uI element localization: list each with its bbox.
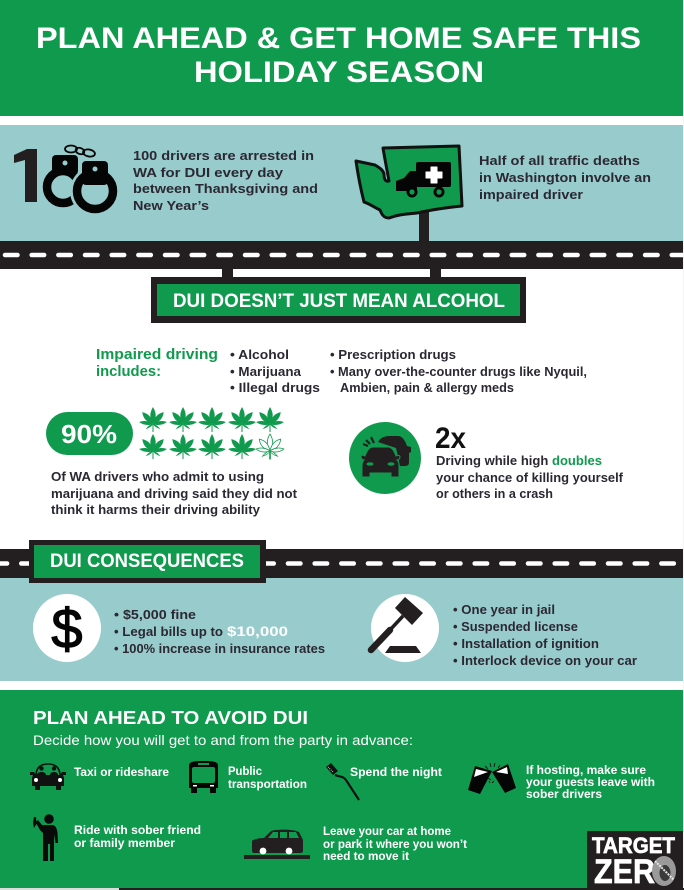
logo: Target Zero: TARGET	[592, 833, 676, 858]
text: financial consequences: $10,000	[227, 623, 288, 639]
text: legal consequences	[453, 602, 637, 668]
icon: dollar sign	[33, 594, 101, 662]
text: legal consequences: • One year in jail	[453, 602, 555, 617]
icon: gavel	[371, 594, 439, 662]
text: traffic deaths: impaired driver	[479, 187, 583, 202]
text: sober friend: Ride with sober friend	[74, 825, 201, 837]
text: marijuana statistic: think it harms their driving ability	[51, 502, 261, 517]
text: hosting: your guests leave with	[526, 777, 655, 789]
text: marijuana statistic: marijuana and driving said they did not	[51, 486, 298, 501]
text: hosting	[526, 765, 655, 801]
callout: 90 percent: 90%	[61, 419, 117, 449]
title: PLAN AHEAD & GET HOME SAFE THIS	[36, 22, 641, 55]
text: legal consequences: • Installation of ignition	[453, 636, 599, 651]
road: upper	[0, 241, 684, 269]
logo: Target Zero	[587, 831, 684, 890]
text: leave your car: Leave your car at home	[323, 826, 451, 838]
text: impaired driving includes: Impaired driving	[96, 347, 218, 363]
icon: person with keys	[33, 814, 58, 861]
text: sober friend	[74, 825, 201, 850]
text: arrests	[133, 148, 318, 213]
icon: taxi	[30, 764, 66, 790]
text: traffic deaths: Half of all traffic deaths	[479, 153, 640, 168]
icon: toothbrush	[326, 763, 359, 800]
text: spend the night: Spend the night	[350, 767, 442, 779]
icon: Washington sign with ambulance	[356, 146, 462, 242]
text: doubles statistic: your chance of killing yourself	[436, 470, 624, 485]
text: financial consequences: • 100% increase in insurance rates	[114, 641, 325, 656]
sign: DUI consequences	[29, 540, 266, 583]
text: impaired driving includes: • Many over-the-counter drugs like Nyquil,	[330, 364, 587, 379]
header banner	[0, 0, 684, 116]
text: impaired driving includes: • Alcohol	[230, 347, 289, 362]
text: subheading: Decide how you will get to and from the party in advance:	[33, 732, 413, 748]
text: marijuana statistic	[51, 469, 298, 517]
text: financial consequences: • Legal bills up to	[114, 624, 223, 639]
title	[36, 22, 641, 89]
text: doubles statistic: or others in a crash	[436, 486, 553, 501]
title: HOLIDAY SEASON	[194, 56, 484, 89]
icon: parked car	[244, 830, 310, 859]
text: financial consequences	[114, 607, 325, 656]
text: leave your car: need to move it	[323, 851, 409, 863]
text: public transportation	[228, 766, 307, 791]
panel: plan ahead	[0, 690, 684, 890]
sign: DUI consequences: DUI CONSEQUENCES	[50, 551, 244, 572]
text: arrests: New Year’s	[133, 198, 209, 213]
text: impaired driving includes: • Marijuana	[230, 364, 302, 379]
text: financial consequences: • $5,000 fine	[114, 607, 196, 622]
callout: 2x crash risk: 2x	[435, 422, 466, 455]
text: impaired driving includes: Ambien, pain & allergy meds	[340, 380, 514, 395]
text: leave your car: or park it where you won’t	[323, 839, 467, 851]
text: legal consequences: • Suspended license	[453, 619, 578, 634]
text: arrests: 100 drivers are arrested in	[133, 148, 314, 163]
text: marijuana statistic: Of WA drivers who admit to using	[51, 469, 264, 484]
icon: crashing cars	[349, 422, 421, 494]
icon: dollar sign: $	[51, 597, 83, 660]
text: doubles statistic	[436, 453, 624, 501]
text: sober friend: or family member	[74, 838, 176, 850]
sign: DUI doesn't just mean alcohol	[151, 268, 526, 323]
icon: 100 with handcuffs	[14, 146, 120, 216]
text: taxi: Taxi or rideshare	[74, 767, 169, 779]
text: public transportation: Public	[228, 766, 263, 778]
icon: clinking glasses	[468, 763, 516, 794]
text: impaired driving includes: includes:	[96, 364, 161, 380]
sign: DUI doesn't just mean alcohol: DUI DOESN’T JUST MEAN ALCOHOL	[173, 291, 505, 312]
text: legal consequences: • Interlock device on your car	[453, 653, 637, 668]
text: impaired driving includes	[96, 347, 587, 395]
heading: plan ahead: PLAN AHEAD TO AVOID DUI	[33, 708, 308, 728]
text: leave your car	[323, 826, 467, 863]
text: impaired driving includes: • Prescription drugs	[330, 347, 456, 362]
callout: 90 percent	[46, 407, 298, 517]
text: hosting: If hosting, make sure	[526, 765, 646, 777]
icon: bus	[189, 761, 218, 793]
text: traffic deaths: in Washington involve an	[479, 170, 651, 185]
text: impaired driving includes: • Illegal drugs	[230, 380, 320, 395]
text: arrests: WA for DUI every day	[133, 165, 284, 180]
callout: 2x crash risk	[349, 422, 624, 501]
icon: marijuana leaves	[139, 407, 284, 459]
panel: statistics	[0, 125, 684, 242]
text: doubles statistic: Driving while high doubles	[436, 453, 602, 468]
panel: DUI consequences	[0, 540, 684, 681]
logo: Target Zero: ZER	[594, 853, 655, 890]
text: arrests: between Thanksgiving and	[133, 181, 318, 196]
text: traffic deaths	[479, 153, 651, 202]
text: public transportation: transportation	[228, 779, 307, 791]
text: hosting: sober drivers	[526, 789, 602, 801]
